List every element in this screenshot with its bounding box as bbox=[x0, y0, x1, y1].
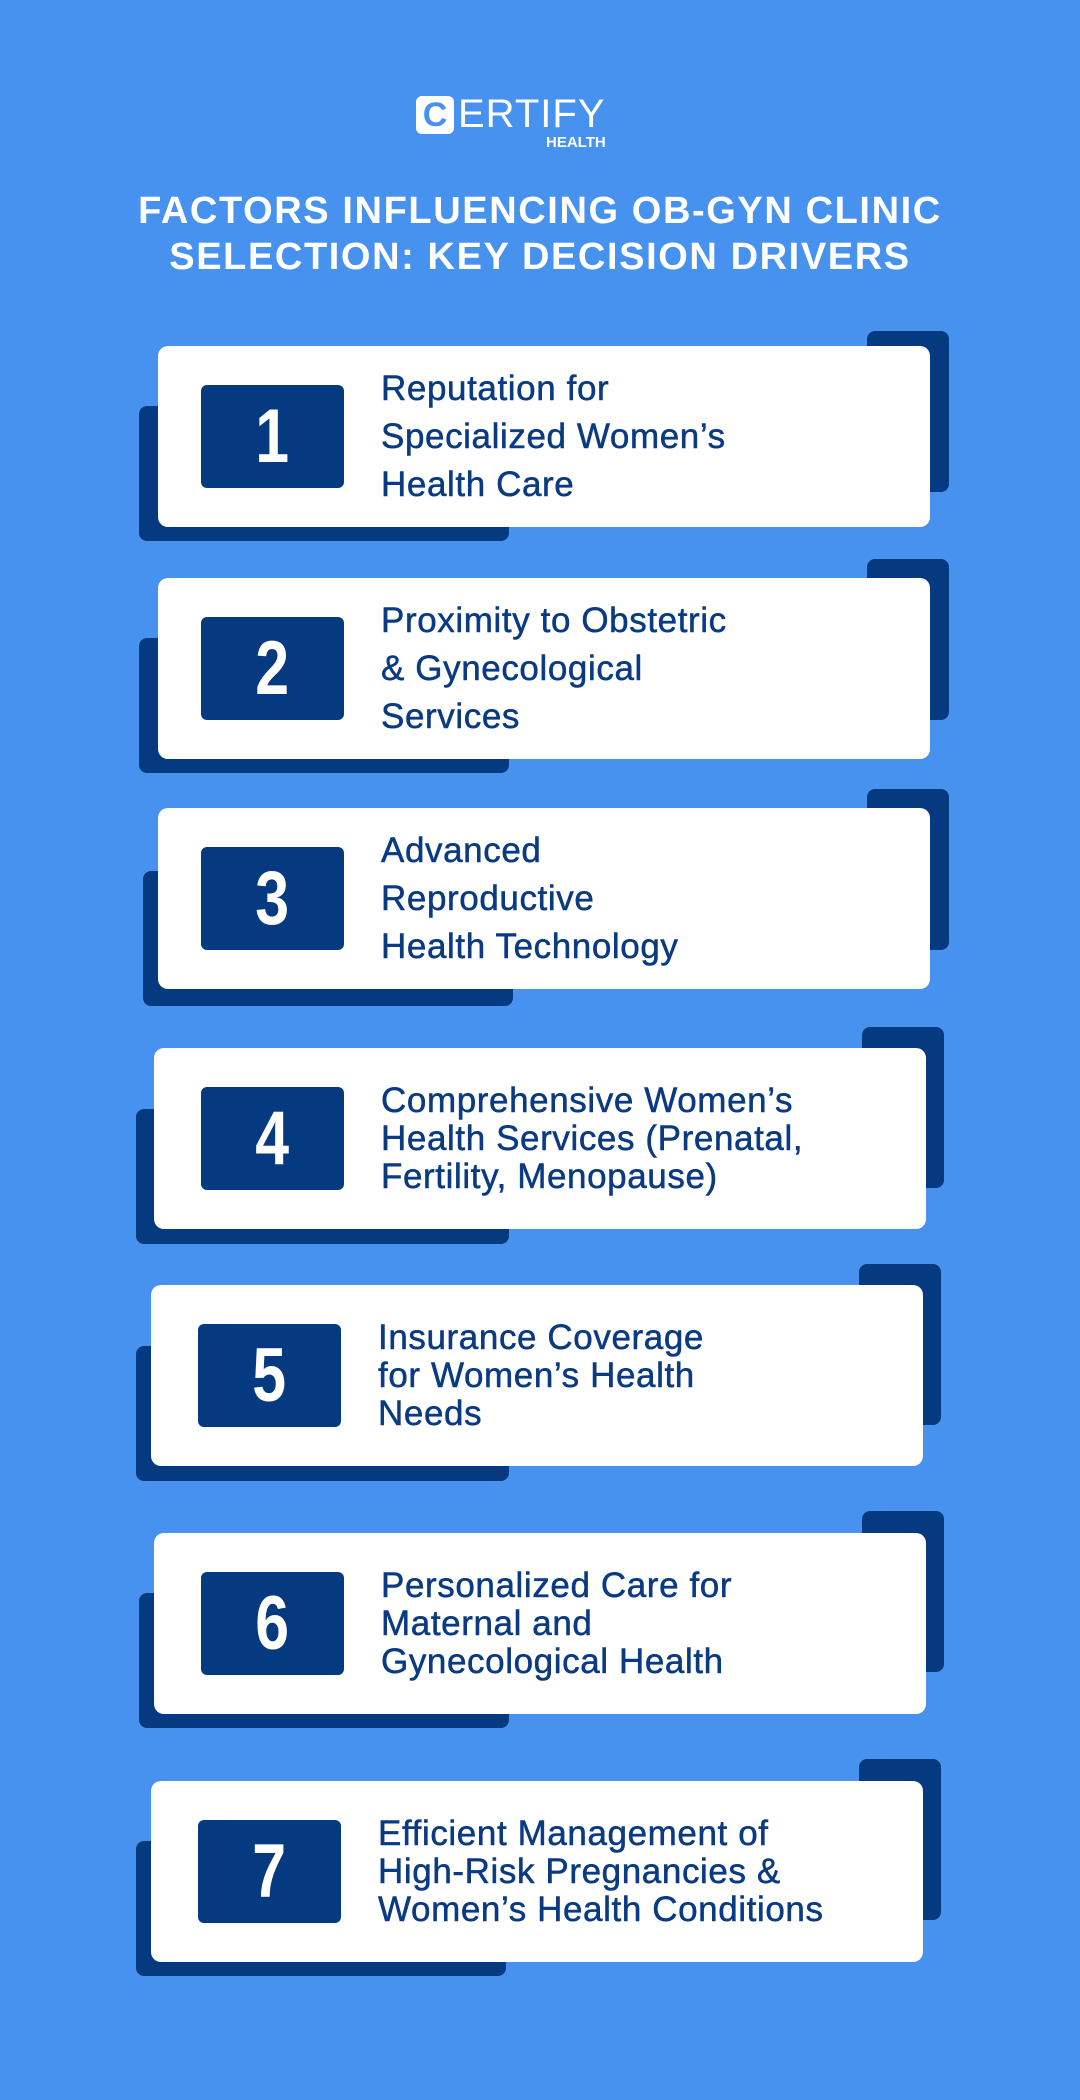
title: FACTORS INFLUENCING OB-GYN CLINIC bbox=[138, 190, 942, 232]
card 5 bbox=[136, 1264, 941, 1481]
number 7: 7 bbox=[253, 1829, 286, 1914]
text 6: Maternal and bbox=[381, 1604, 592, 1642]
text 1: Reputation for bbox=[381, 368, 609, 408]
logo: ERTIFY bbox=[458, 92, 606, 136]
number 5: 5 bbox=[253, 1333, 286, 1418]
text 1 bbox=[381, 368, 726, 504]
number 4: 4 bbox=[256, 1096, 289, 1181]
logo bbox=[416, 92, 606, 151]
number 1: 1 bbox=[256, 394, 289, 479]
text 3: Advanced bbox=[381, 830, 541, 870]
text 1: Specialized Women’s bbox=[381, 416, 726, 456]
text 6: Personalized Care for bbox=[381, 1566, 732, 1604]
number 3 bbox=[201, 847, 344, 950]
text 2: & Gynecological bbox=[381, 648, 643, 688]
card 6 bbox=[139, 1511, 944, 1728]
card 7 bbox=[136, 1759, 941, 1976]
text 4: Health Services (Prenatal, bbox=[381, 1118, 803, 1158]
text 3: Reproductive bbox=[381, 878, 594, 918]
title bbox=[138, 190, 942, 278]
text 1: Health Care bbox=[381, 464, 574, 504]
number 4 bbox=[201, 1087, 344, 1190]
number 3: 3 bbox=[256, 856, 289, 941]
text 7: High-Risk Pregnancies & bbox=[378, 1852, 781, 1890]
text 5: Needs bbox=[378, 1394, 482, 1432]
text 4: Fertility, Menopause) bbox=[381, 1156, 718, 1196]
text 4: Comprehensive Women’s bbox=[381, 1080, 793, 1120]
text 4 bbox=[381, 1080, 803, 1196]
text 6 bbox=[381, 1566, 732, 1681]
text 2: Proximity to Obstetric bbox=[381, 600, 727, 640]
text 2 bbox=[381, 600, 727, 736]
number 1 bbox=[201, 385, 344, 488]
number 7 bbox=[198, 1820, 341, 1923]
text 5: for Women’s Health bbox=[378, 1356, 695, 1394]
text 7: Efficient Management of bbox=[378, 1814, 769, 1852]
number 6: 6 bbox=[256, 1581, 289, 1666]
number 2: 2 bbox=[256, 626, 289, 711]
text 5: Insurance Coverage bbox=[378, 1318, 704, 1356]
text 5 bbox=[378, 1318, 704, 1432]
logo: C bbox=[423, 96, 447, 134]
text 3: Health Technology bbox=[381, 926, 679, 966]
text 6: Gynecological Health bbox=[381, 1642, 724, 1680]
number 5 bbox=[198, 1324, 341, 1427]
logo: HEALTH bbox=[546, 134, 606, 151]
title: SELECTION: KEY DECISION DRIVERS bbox=[169, 236, 911, 278]
number 6 bbox=[201, 1572, 344, 1675]
card 1 bbox=[139, 331, 949, 541]
card 2 bbox=[139, 559, 949, 773]
number 2 bbox=[201, 617, 344, 720]
text 7: Women’s Health Conditions bbox=[378, 1890, 824, 1928]
card 4 bbox=[136, 1027, 944, 1244]
text 3 bbox=[380, 830, 679, 966]
text 7 bbox=[378, 1814, 824, 1928]
card 3 bbox=[143, 789, 949, 1006]
text 2: Services bbox=[381, 696, 520, 736]
